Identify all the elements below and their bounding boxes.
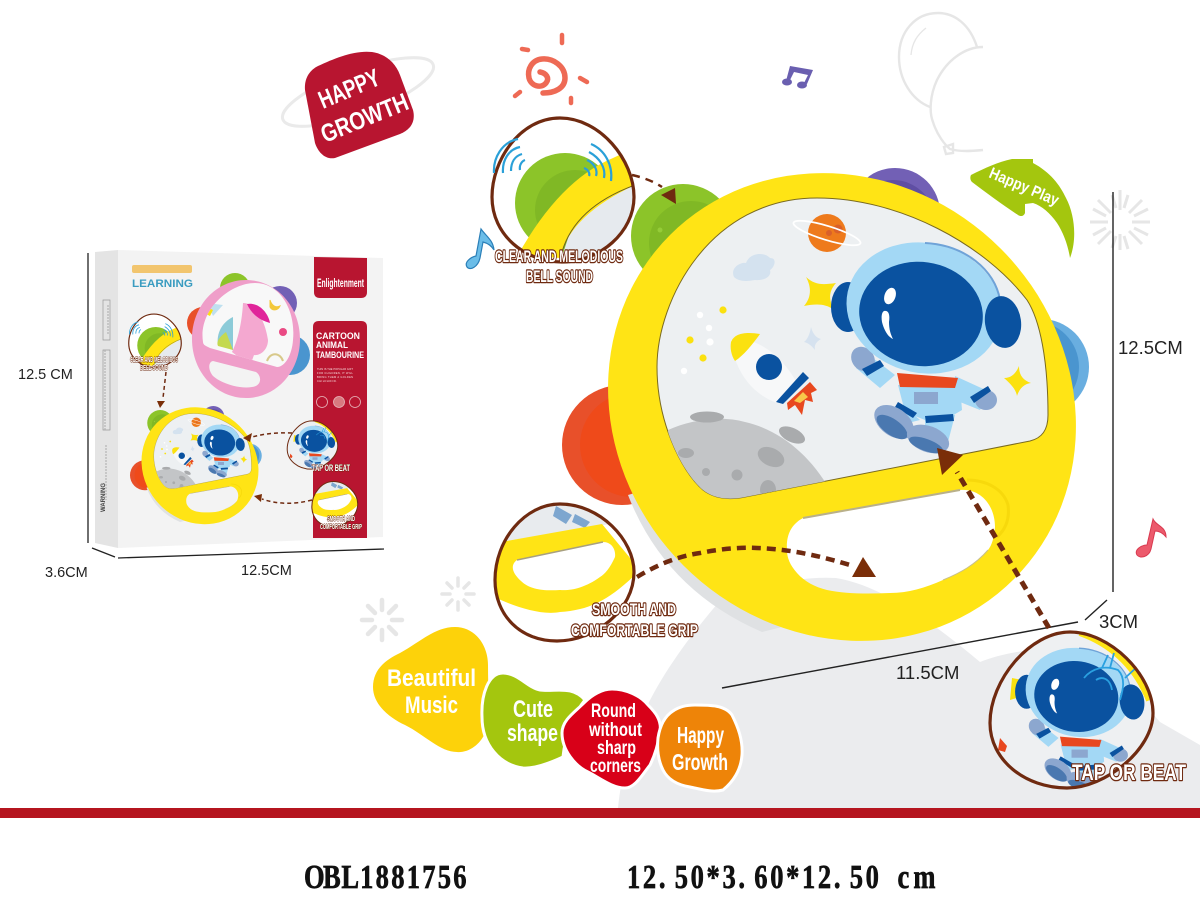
red panel: enlightenment [314, 257, 367, 298]
moon [668, 412, 830, 520]
blob: happy growth: Growth [672, 749, 728, 775]
icon: red music note [1136, 519, 1166, 557]
arrow badge: happy play: Happy Play [986, 165, 1061, 210]
icon: purple music notes [782, 66, 813, 88]
mini magnifier: grip: COMFORTABLE GRIP [320, 524, 362, 531]
mini magnifier: bell: BELL SOUND [140, 365, 168, 372]
star: yellow right [1004, 366, 1031, 396]
star: yellow left [804, 277, 836, 310]
icon: small burst large [362, 600, 402, 640]
dimension: 11.5CM width: 11.5CM [896, 662, 959, 683]
blob: beautiful music: Beautiful [387, 665, 476, 692]
blob: round without sharp corners: Round [591, 701, 636, 722]
planet [791, 214, 863, 252]
icon: sparkle burst right [1090, 190, 1150, 250]
package box [95, 250, 383, 548]
label: smooth and: SMOOTH AND [592, 600, 676, 619]
dimension: 12.5CM height: 12.5CM [1118, 337, 1183, 358]
box front [118, 250, 383, 548]
blob: round without sharp corners [562, 689, 660, 788]
blob: round without sharp corners: corners [590, 756, 641, 777]
red panel: cartoon animal tambourine [313, 321, 367, 538]
background grey hill [618, 578, 1200, 808]
icon: blue music note [466, 229, 494, 269]
dimension: box width 12.5CM [118, 549, 384, 579]
bell: blue [987, 319, 1089, 415]
package dimensions: 12.50*3.60*12.50 cm [627, 858, 936, 896]
yellow tambourine mini [130, 406, 262, 524]
badge: happy growth [275, 44, 441, 158]
mini magnifier: bell [129, 314, 184, 408]
red panel: cartoon animal tambourine: CHILDHOOD. [317, 379, 337, 383]
dimension: box depth 3.6CM [45, 548, 115, 581]
blob: cute shape: shape [507, 720, 558, 747]
callout: smooth and comfortable grip [490, 504, 876, 641]
callout: clear and melodious bell sound [466, 118, 676, 286]
feature blobs [373, 627, 742, 791]
window [657, 198, 1048, 499]
icon: balloons outline [899, 13, 983, 154]
blob: round without sharp corners: sharp [597, 738, 636, 759]
mini magnifier: tap: TAP OR BEAT [312, 463, 350, 473]
sound waves [494, 139, 611, 181]
dimension: 3CM depth: 3CM [1099, 611, 1138, 632]
bell: red [562, 385, 684, 505]
label: bell sound: BELL SOUND [526, 267, 593, 286]
box side [95, 250, 118, 548]
red band [0, 808, 1200, 818]
dimension: box depth 3.6CM: 3.6CM [45, 565, 88, 581]
blob: happy growth: Happy [677, 722, 724, 748]
arrow badge: happy play [970, 159, 1074, 258]
arrow: to handle [637, 548, 876, 577]
dimension: box height 12.5 CM: 12.5 CM [18, 367, 73, 383]
bell: green [631, 184, 735, 288]
icon: sun [515, 35, 587, 103]
red panel: cartoon animal tambourine: BRING THEM A GOLDEN [317, 375, 353, 379]
red panel: cartoon animal tambourine: FOR CHILDREN, IT WILL [317, 371, 354, 375]
mini magnifier: grip: SMOOTH AND [327, 516, 355, 523]
astronaut [831, 228, 1024, 459]
red panel: cartoon animal tambourine: THIS IS THE POPULAR GIFT [317, 367, 353, 371]
rocket [731, 333, 817, 415]
tambourine ring and handle [608, 173, 1076, 641]
callout: tap or beat [937, 448, 1186, 795]
mini magnifier: grip [254, 482, 362, 531]
dots [681, 306, 727, 374]
dimension: box width 12.5CM: 12.5CM [241, 563, 292, 579]
blob: beautiful music [373, 627, 488, 752]
cloud [733, 254, 775, 281]
magnifier: astronaut tap [990, 632, 1153, 795]
blob: cute shape: Cute [513, 696, 553, 723]
item code: OBL1881756 [304, 858, 467, 896]
box side: WARNING [101, 483, 107, 512]
red panel: cartoon animal tambourine: TAMBOURINE [316, 350, 364, 360]
pink unicorn tambourine [187, 273, 310, 398]
red panel: cartoon animal tambourine: CARTOON [316, 331, 360, 341]
badge: happy growth: HAPPY [314, 64, 384, 115]
dimension: 11.5CM width [722, 622, 1078, 688]
dimension: 3CM depth [1085, 600, 1138, 632]
red panel: enlightenment: Enlightenment [317, 276, 364, 290]
blob: cute shape [482, 673, 585, 768]
label: clear and melodious: CLEAR AND MELODIOUS [495, 247, 623, 266]
arrow: to bell [632, 175, 676, 204]
bell: purple [850, 168, 940, 264]
red panel: cartoon animal tambourine: ANIMAL [316, 340, 348, 350]
blob: beautiful music: Music [405, 692, 458, 719]
badge: happy growth: GROWTH [317, 88, 413, 149]
magnifier: bell [492, 118, 640, 265]
mini magnifier: tap [243, 421, 350, 473]
brand: learning: LEARNING [132, 278, 193, 290]
tag [132, 265, 192, 273]
label: comfortable grip: COMFORTABLE GRIP [571, 621, 698, 640]
blob: happy growth [658, 705, 742, 791]
blob: round without sharp corners: without [588, 720, 643, 741]
magnifier: grip [490, 504, 640, 641]
star: pale [804, 327, 821, 350]
icon: small burst small [442, 578, 474, 610]
mini magnifier: bell: CLEAR AND MELODIOUS [130, 357, 178, 364]
arrow: to astronaut [937, 448, 1049, 628]
product: yellow astronaut tambourine [562, 168, 1089, 641]
